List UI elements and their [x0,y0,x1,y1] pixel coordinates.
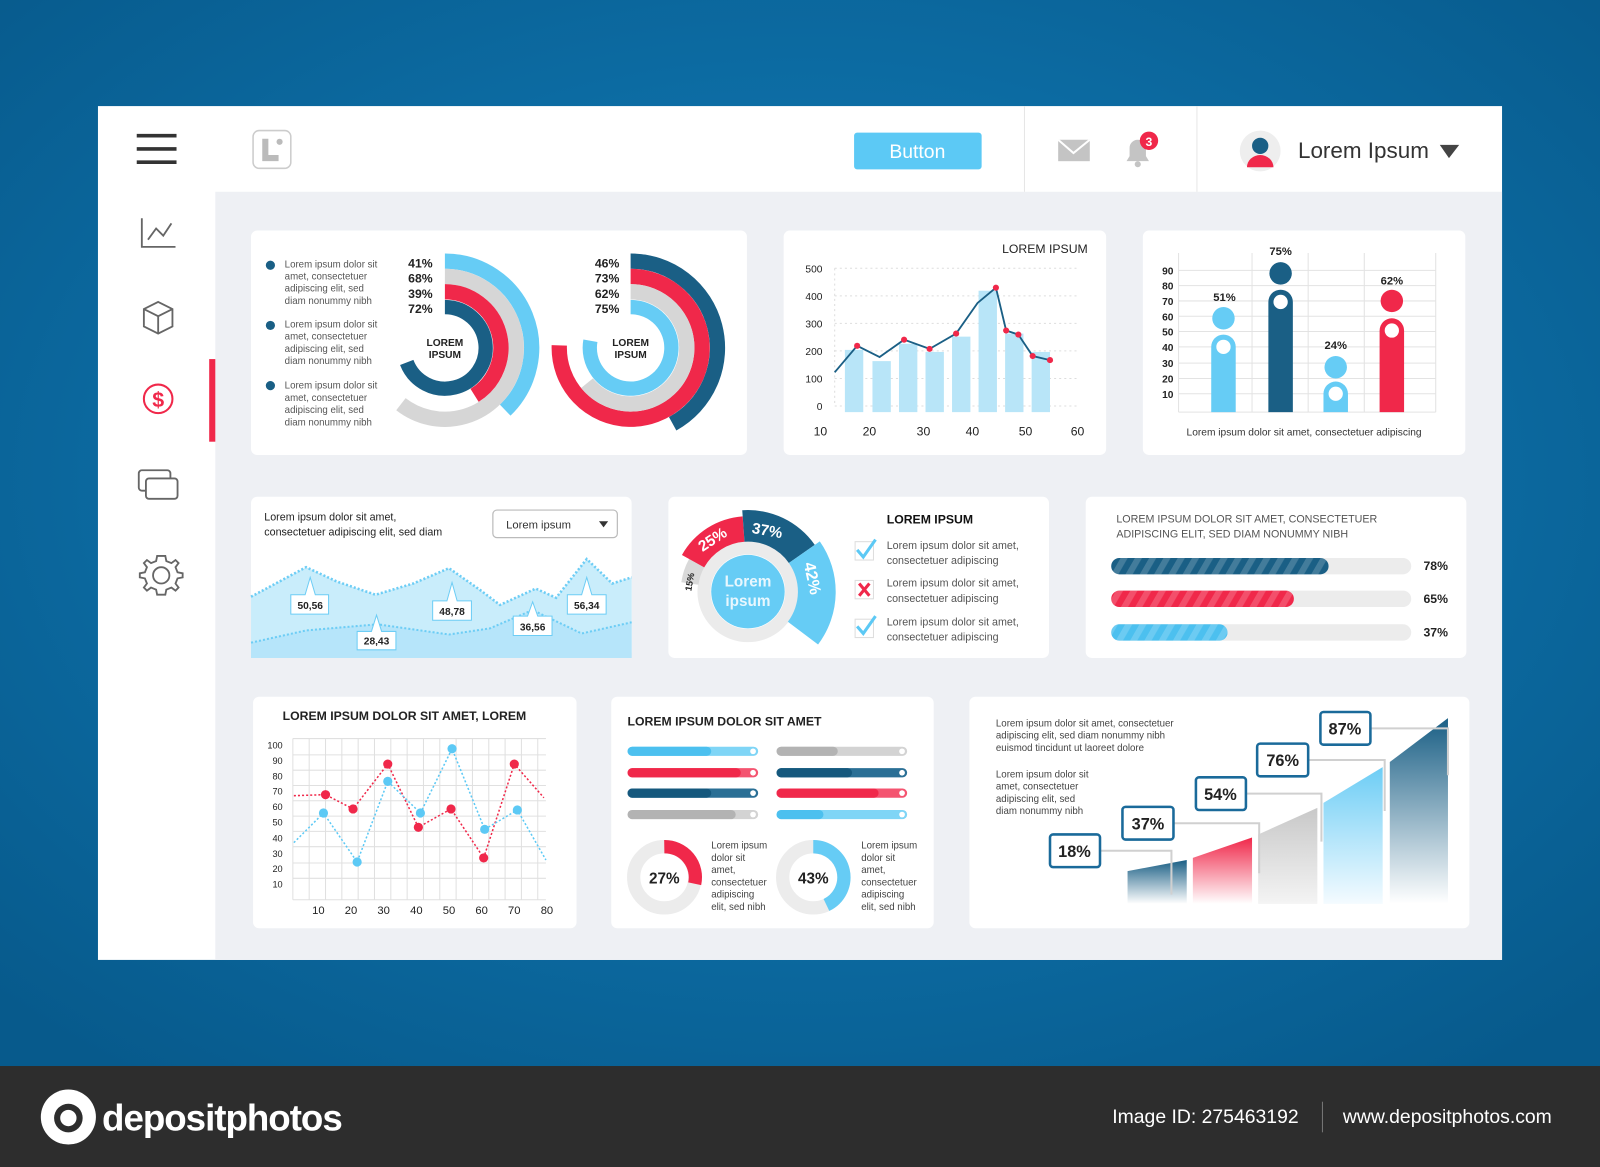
panel: dotted line chart: 50 [272,817,283,827]
panel: dotted line chart: LOREM IPSUM DOLOR SIT AMET, LOREM [283,709,526,723]
segmented donut: 42% [800,561,824,597]
checklist: Lorem ipsum dolor sit amet, [887,540,1019,552]
panel: capsule bar chart: Lorem ipsum dolor sit amet, consectetuer adipiscing [1187,428,1422,439]
legend list: amet, consectetuer [285,393,368,404]
panel: line and bar chart: 10 [814,425,827,439]
icon: dollar (active) [144,385,172,413]
panel: slider bars and small donuts: amet, [861,865,885,876]
panel: capsule bar chart: 80 [1162,282,1174,293]
panel: capsule bar chart: 50 [1162,328,1174,339]
panel: slider bars and small donuts: adipiscing [711,890,754,901]
legend list: adipiscing elit, sed [285,405,364,416]
panel: line and bar chart: 60 [1071,425,1085,439]
panel: capsule bar chart: 62% [1381,276,1403,288]
panel: slider bars and small donuts: amet, [711,865,735,876]
panel: dotted line chart: 80 [272,771,283,781]
panel: growth bars: 76% [1266,752,1299,770]
panel: area chart: consectetuer adipiscing elit, sed diam [264,527,442,539]
panel: line and bar chart: 20 [863,425,876,439]
dropdown: Lorem ipsum [506,519,571,531]
checklist [855,540,1019,644]
segmented donut: 15% [683,572,696,592]
legend list: adipiscing elit, sed [285,344,364,355]
button: Button [889,141,945,163]
panel: line and bar chart: 300 [805,319,823,330]
donut 43%: 43% [798,870,829,887]
panel: growth bars: 18% [1058,843,1091,861]
checklist: consectetuer adipiscing [887,555,999,567]
panel: dotted line chart: 40 [410,905,423,917]
callouts [291,577,606,650]
panel: dotted line chart: 70 [272,787,283,797]
panel: line and bar chart: LOREM IPSUM [1002,242,1088,256]
icon: gear [140,556,183,595]
line [835,288,1050,372]
callouts: 36,56 [520,622,546,633]
panel: dotted line chart: 30 [272,849,283,859]
panel: dotted line chart: 50 [443,905,455,917]
panel: area chart [251,497,632,658]
panel: line and bar chart: 50 [1019,425,1033,439]
website: www.depositphotos.com [1342,1106,1552,1128]
panel: dotted line chart: 10 [272,879,283,889]
panel: capsule bar chart: 24% [1324,340,1347,352]
panel: capsule bar chart: 20 [1162,375,1174,386]
panel: radial donuts: 68% [408,272,433,286]
panel: line and bar chart: 400 [805,292,823,303]
active indicator [209,359,215,442]
legend list: amet, consectetuer [285,332,368,343]
icon: dollar (active): $ [152,388,164,412]
panel: growth bars: euismod tincidunt ut laoreet dolore [996,743,1144,754]
panel: growth bars: amet, consectetuer [996,782,1079,793]
dropdown [493,510,617,538]
icon: cards [139,470,178,499]
panel: progress bars: 65% [1423,592,1448,606]
icon: bell with badge: 3 [1146,135,1153,149]
panel: growth bars: Lorem ipsum dolor sit amet, consectetuer [996,718,1174,729]
panel: growth bars [969,697,1469,928]
panel: line and bar chart: 0 [817,402,823,413]
legend list: Lorem ipsum dolor sit [285,319,378,330]
donut 2 [559,261,717,424]
panel: dotted line chart: 20 [272,864,283,874]
panel: growth bars: adipiscing elit, sed diam nonummy nibh [996,731,1165,742]
panel: line and bar chart: 100 [805,375,823,386]
panel: dotted line chart: 30 [377,905,390,917]
panel: line and bar chart [784,231,1106,455]
panel: growth bars: diam nonummy nibh [996,806,1083,817]
panel: dotted line chart: 100 [267,741,283,751]
sidebar [137,136,215,595]
button [854,133,982,169]
segmented donut: Lorem [725,574,771,591]
legend list: diam nonummy nibh [285,296,372,307]
panel: progress bars: 37% [1423,626,1448,640]
segmented donut: 37% [751,520,784,542]
panel: capsule bar chart [1143,231,1465,455]
panel: radial donuts [251,231,747,455]
donut 27%: 27% [649,870,680,887]
avatar [1240,131,1281,171]
logo text: depositphotos [102,1097,342,1138]
segmented donut: 25% [695,524,731,555]
icon: dropdown arrow [1440,145,1459,158]
panel: progress bars: LOREM IPSUM DOLOR SIT AMET, CONSECTETUER [1116,513,1378,525]
callouts: 48,78 [439,607,465,618]
panel: growth bars: 37% [1132,815,1165,833]
dashboard frame [98,106,1502,960]
panel: radial donuts: LOREM [612,338,649,349]
logo box [253,131,291,168]
legend list: diam nonummy nibh [285,356,372,367]
panel: slider bars and small donuts: elit, sed nibh [711,902,766,913]
checklist: consectetuer adipiscing [887,632,999,644]
legend list: Lorem ipsum dolor sit [285,259,378,270]
panel: dotted line chart: 60 [272,802,283,812]
donut 1 [401,261,532,419]
panel: capsule bar chart: 51% [1213,292,1236,304]
icon: hamburger [137,136,177,162]
panel: dotted line chart [253,697,577,928]
panel: growth bars: 87% [1329,720,1362,738]
panel: slider bars and small donuts: dolor sit [711,853,745,864]
panel: capsule bar chart: 10 [1162,390,1174,401]
panel: capsule bar chart: 90 [1162,266,1174,277]
segmented donut [681,510,836,645]
panel: radial donuts: 62% [595,287,619,301]
panel: progress bars: ADIPISCING ELIT, SED DIAM NONUMMY NIBH [1116,529,1348,541]
panel: dotted line chart: 60 [475,905,488,917]
panel: dotted line chart: 90 [272,756,283,766]
panel: slider bars and small donuts: consectetuer [861,877,917,888]
legend list: amet, consectetuer [285,272,368,283]
segmented donut: ipsum [725,593,770,610]
panel: slider bars and small donuts: LOREM IPSUM DOLOR SIT AMET [628,714,822,728]
panel: growth bars: adipiscing elit, sed [996,794,1075,805]
panel: slider bars and small donuts: Lorem ipsum [861,841,917,852]
panel: radial donuts: 41% [408,256,433,270]
panel: capsule bar chart: 40 [1162,343,1174,354]
donut 43% [783,847,844,908]
footer bar [0,1066,1600,1167]
panel: growth bars: Lorem ipsum dolor sit [996,769,1089,780]
panel: line and bar chart: 200 [805,347,823,358]
panel: slider bars and small donuts: consectetuer [711,877,767,888]
checklist: consectetuer adipiscing [887,593,999,605]
panel: slider bars and small donuts: adipiscing [861,890,904,901]
image id: Image ID: 275463192 [1112,1106,1299,1128]
legend list: Lorem ipsum dolor sit [285,381,378,392]
checklist: Lorem ipsum dolor sit amet, [887,578,1019,590]
panel: capsule bar chart: 30 [1162,359,1174,370]
panel: line and bar chart: 500 [805,264,823,275]
panel: radial donuts: 39% [408,287,433,301]
panel: area chart: Lorem ipsum dolor sit amet, [264,511,396,523]
icon: cube [144,302,172,334]
user name: Lorem Ipsum [1298,138,1429,163]
icon: camera logo [41,1089,96,1145]
panel: radial donuts: IPSUM [429,350,461,361]
panel: dotted line chart: 70 [508,905,521,917]
panel: dotted line chart: 40 [272,834,283,844]
callouts: 50,56 [297,601,323,612]
panel: radial donuts: 73% [595,272,619,286]
donut 27% [634,847,695,908]
legend list: adipiscing elit, sed [285,284,364,295]
header [253,106,1459,192]
panel: growth bars: 54% [1204,786,1237,804]
panel: line and bar chart: 30 [917,425,930,439]
panel: capsule bar chart: 70 [1162,297,1174,308]
panel: line and bar chart: 40 [966,425,979,439]
panel: segmented donut with checklist [668,497,1049,658]
icon: line chart [142,218,176,247]
callouts: 28,43 [364,637,390,648]
legend list [266,259,378,428]
panel: capsule bar chart: 75% [1269,246,1292,258]
panel: radial donuts: IPSUM [614,350,647,361]
panel: radial donuts: LOREM [426,338,463,349]
panel: radial donuts: 72% [408,302,433,316]
panel: slider bars and small donuts: Lorem ipsum [711,841,767,852]
panel: segmented donut with checklist: LOREM IPSUM [887,512,973,526]
panel: slider bars and small donuts: elit, sed nibh [861,902,916,913]
icon: bell with badge [1127,132,1158,167]
checklist: Lorem ipsum dolor sit amet, [887,616,1019,628]
panel: progress bars [1086,497,1466,658]
icon: mail [1058,140,1090,161]
callouts: 56,34 [574,601,600,612]
panel: slider bars and small donuts: dolor sit [861,853,895,864]
panel: progress bars: 78% [1423,559,1448,573]
panel: dotted line chart: 10 [312,905,325,917]
bars [845,291,1050,412]
legend list: diam nonummy nibh [285,417,372,428]
panel: capsule bar chart: 60 [1162,312,1174,323]
panel: radial donuts: 75% [595,302,619,316]
panel: radial donuts: 46% [595,256,619,270]
panel: dotted line chart: 20 [345,905,357,917]
panel: slider bars and small donuts [611,697,934,928]
panel: dotted line chart: 80 [541,905,553,917]
